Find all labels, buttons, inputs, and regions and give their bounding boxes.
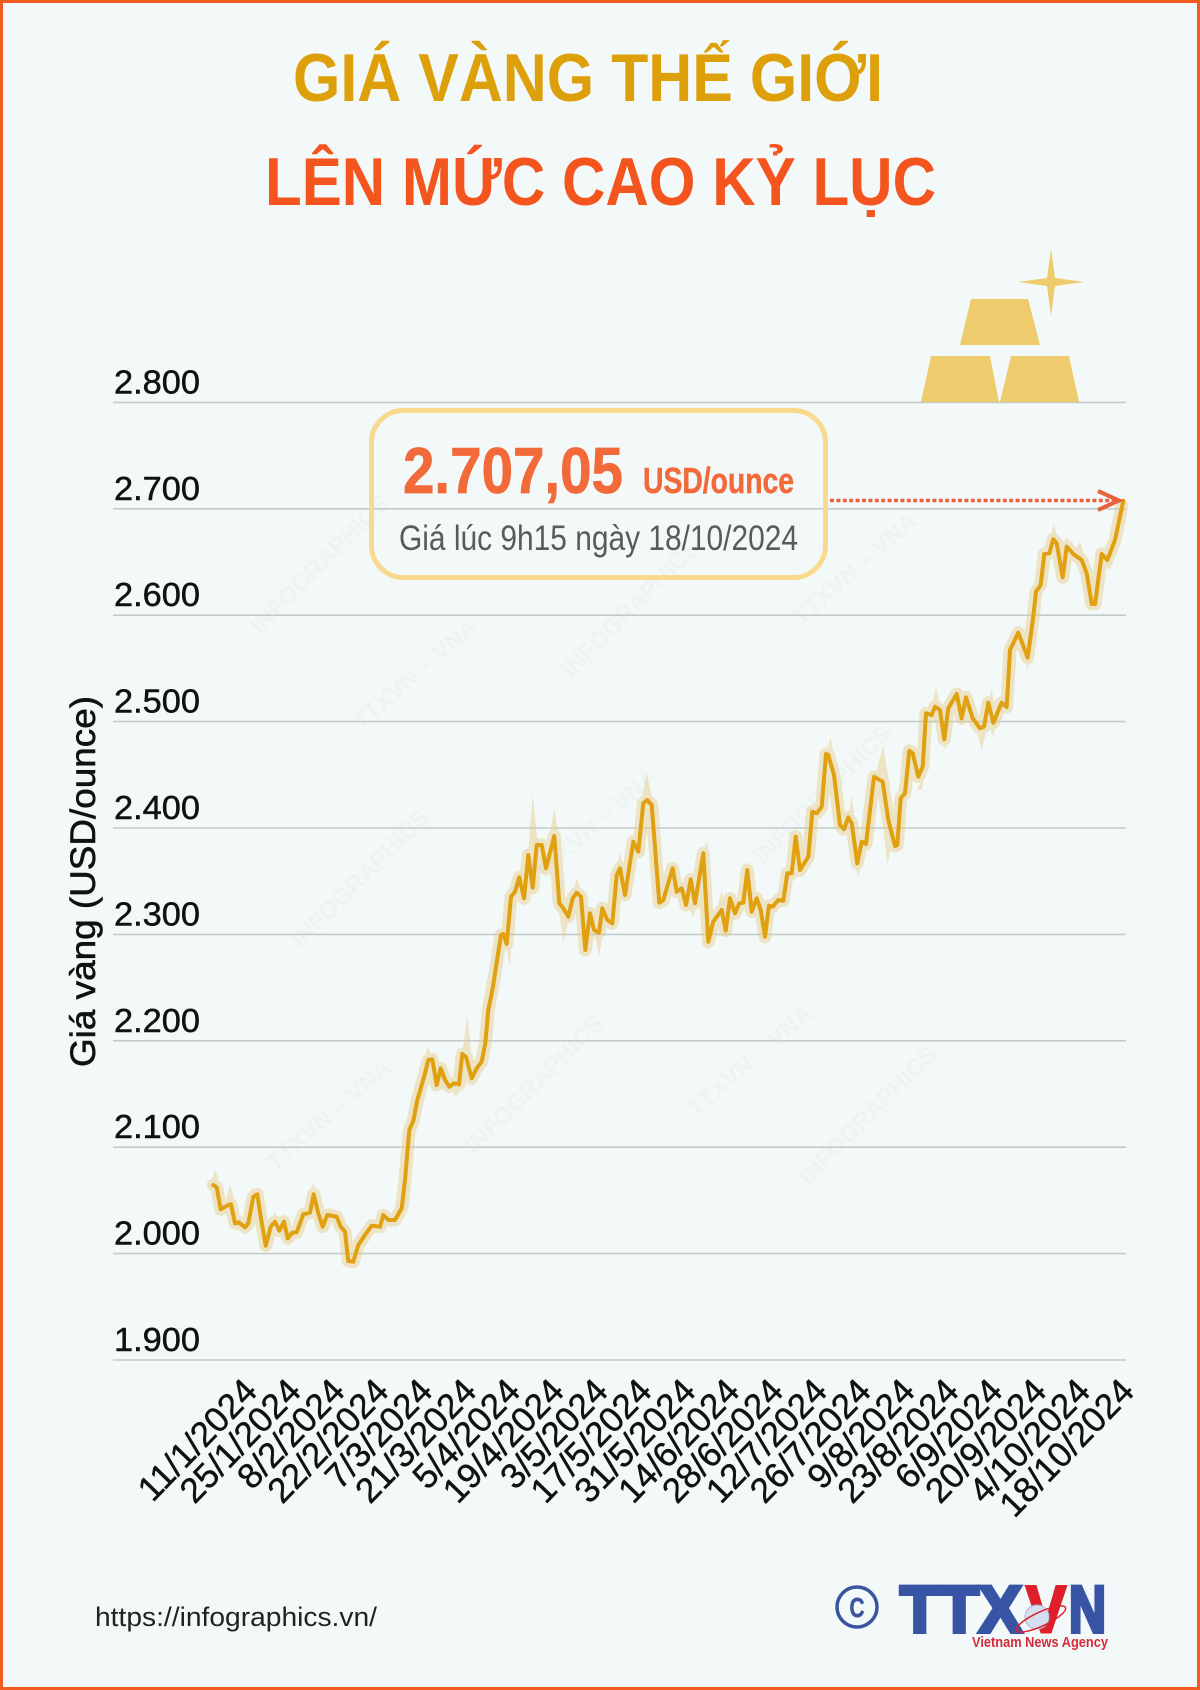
logo: TTXVN: TTX bbox=[900, 1572, 1022, 1646]
watermarks: TTXVN – VNA bbox=[682, 1000, 818, 1123]
x axis labels: 4/10/2024 bbox=[962, 1371, 1098, 1511]
x axis labels: 22/2/2024 bbox=[260, 1371, 396, 1511]
logo: TTXVN: N bbox=[1069, 1572, 1106, 1646]
y axis labels: 2.400 bbox=[114, 789, 200, 826]
watermarks: INFOGRAPHICS bbox=[793, 1041, 942, 1190]
x axis labels: 19/4/2024 bbox=[435, 1371, 572, 1511]
icon: copyright: C bbox=[850, 1592, 864, 1623]
watermarks: TTXVN – VNA bbox=[347, 613, 483, 736]
x axis labels: 14/6/2024 bbox=[611, 1371, 747, 1511]
price unit: USD/ounce bbox=[643, 460, 794, 501]
y axis labels: 2.600 bbox=[114, 576, 200, 613]
watermarks: INFOGRAPHICS bbox=[460, 1010, 609, 1159]
y axis labels: 2.700 bbox=[114, 470, 200, 507]
watermarks: TTXVN – VNA bbox=[527, 763, 663, 886]
x axis labels: 26/7/2024 bbox=[742, 1371, 879, 1511]
watermarks: TTXVN – VNA bbox=[787, 508, 923, 631]
y axis labels: 2.500 bbox=[114, 683, 200, 720]
x axis labels: 9/8/2024 bbox=[800, 1371, 923, 1497]
price value: 2.707,05 bbox=[403, 434, 623, 507]
watermarks: INFOGRAPHICS bbox=[556, 534, 705, 683]
x axis labels: 31/5/2024 bbox=[567, 1371, 703, 1511]
y axis labels: 2.300 bbox=[114, 895, 200, 932]
y axis labels: 2.800 bbox=[114, 363, 200, 400]
price timestamp: Giá lúc 9h15 ngày 18/10/2024 bbox=[399, 519, 798, 558]
x axis labels: 11/1/2024 bbox=[130, 1371, 265, 1509]
logo: TTXVN: V bbox=[1026, 1572, 1066, 1646]
x axis labels: 17/5/2024 bbox=[523, 1371, 659, 1511]
watermarks: INFOGRAPHICS bbox=[748, 720, 897, 869]
y axis labels: 1.900 bbox=[114, 1321, 200, 1358]
y axis labels: 2.200 bbox=[114, 1002, 200, 1039]
watermarks: INFOGRAPHICS bbox=[245, 490, 394, 639]
y axis labels: 2.000 bbox=[114, 1215, 200, 1252]
x axis labels: 23/8/2024 bbox=[830, 1371, 966, 1511]
x axis labels: 12/7/2024 bbox=[699, 1371, 835, 1511]
watermarks bbox=[245, 490, 942, 1190]
x axis labels: 5/4/2024 bbox=[405, 1371, 528, 1497]
gold price line bbox=[213, 501, 1123, 1262]
x axis labels: 8/2/2024 bbox=[230, 1371, 352, 1497]
callout: latest price bbox=[372, 410, 826, 578]
icon: copyright bbox=[837, 1587, 877, 1627]
x axis labels: 6/9/2024 bbox=[888, 1371, 1010, 1497]
x axis labels: 25/1/2024 bbox=[172, 1371, 309, 1511]
title line 2: LÊN MỨC CAO KỶ LỤC bbox=[265, 143, 936, 220]
y axis labels: 2.100 bbox=[114, 1108, 200, 1145]
x axis labels: 18/10/2024 bbox=[992, 1371, 1142, 1525]
x axis labels: 28/6/2024 bbox=[655, 1371, 791, 1511]
watermarks: INFOGRAPHICS bbox=[286, 804, 435, 953]
logo: TTXVN bbox=[900, 1572, 1109, 1651]
x axis labels bbox=[130, 1371, 1142, 1525]
watermarks: TTXVN – VNA bbox=[261, 1054, 397, 1177]
grid lines bbox=[113, 402, 1126, 1360]
y axis title: Giá vàng (USD/ounce) bbox=[64, 696, 103, 1067]
price range band bbox=[209, 506, 1122, 1269]
x axis labels: 7/3/2024 bbox=[317, 1371, 440, 1497]
logo: TTXVN: Vietnam News Agency bbox=[972, 1634, 1109, 1651]
footer url: https://infographics.vn/ bbox=[95, 1602, 378, 1632]
x axis labels: 3/5/2024 bbox=[493, 1371, 616, 1497]
title line 1: GIÁ VÀNG THẾ GIỚI bbox=[293, 39, 883, 116]
y axis labels bbox=[114, 363, 200, 1358]
title bbox=[265, 39, 936, 220]
icon: gold bars and sparkle bbox=[921, 249, 1084, 402]
arrow: callout to latest point bbox=[830, 491, 1119, 510]
x axis labels: 21/3/2024 bbox=[348, 1371, 484, 1511]
x axis labels: 20/9/2024 bbox=[918, 1371, 1054, 1511]
